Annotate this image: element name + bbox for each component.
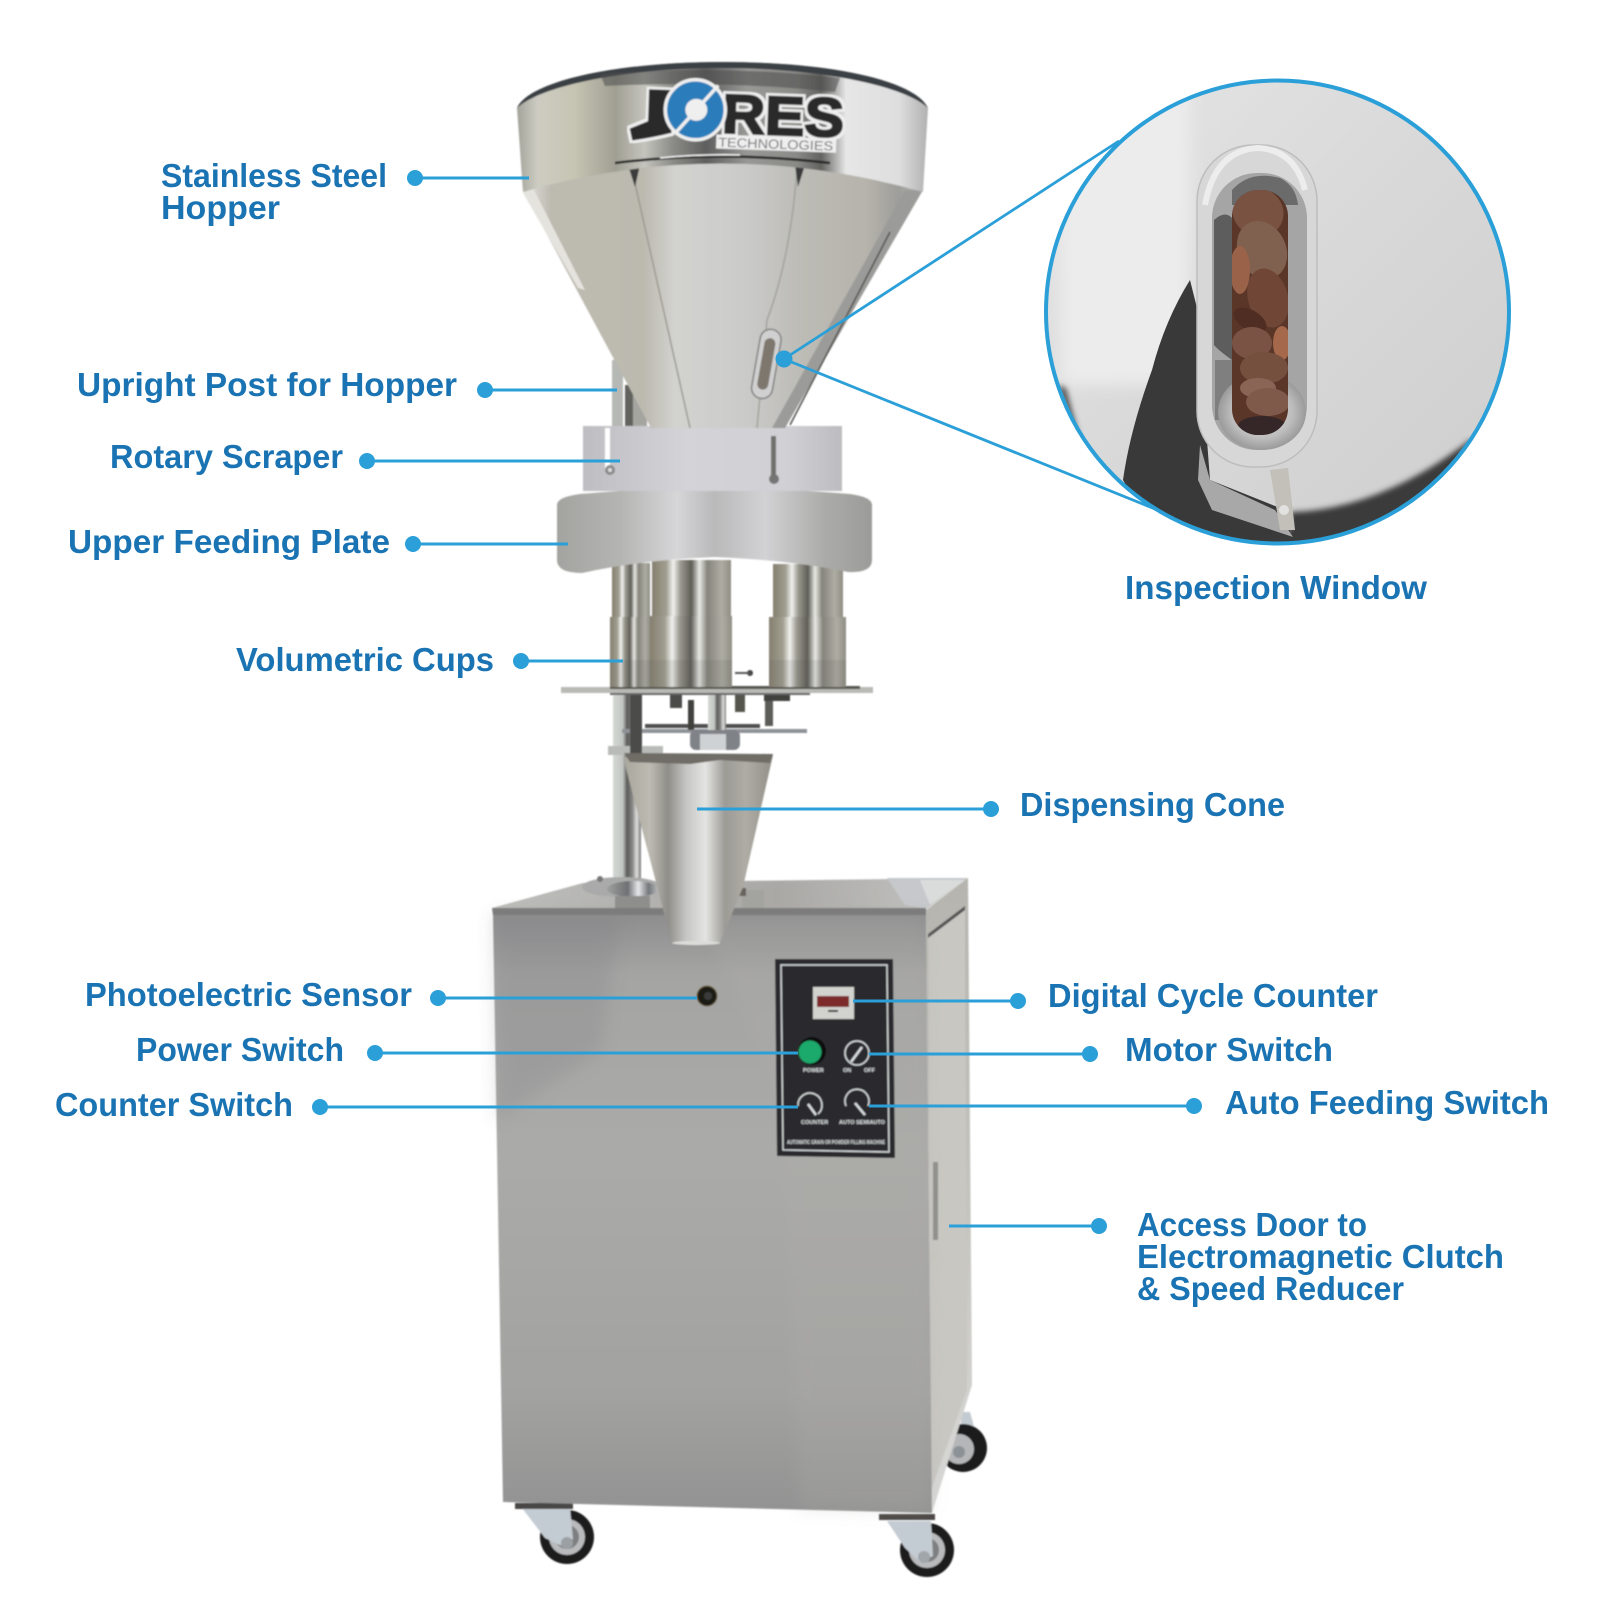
volumetric cups: [610, 560, 846, 687]
power button: [798, 1037, 826, 1074]
upright post and flange: [582, 692, 764, 908]
logo letter J: [629, 89, 673, 142]
callout: motor switch: Motor Switch: [1125, 1031, 1333, 1068]
callout: photoelectric sensor: [85, 976, 697, 1013]
counter dial: COUNTER: [801, 1120, 828, 1126]
logo: TECHNOLOGIES: [718, 135, 834, 154]
callout: dispensing cone: Dispensing Cone: [1020, 786, 1285, 823]
callout: auto feeding switch: Auto Feeding Switch: [1225, 1084, 1549, 1121]
mechanism below plate: [608, 692, 807, 755]
motor dial: ON: [843, 1068, 851, 1074]
callout: upper feeding plate: Upper Feeding Plate: [68, 523, 390, 560]
counter dial: [798, 1093, 828, 1126]
hopper cone: [523, 149, 923, 428]
leader lines to inset: [776, 141, 1160, 511]
hopper posts: [612, 360, 647, 430]
callout: volumetric cups: Volumetric Cups: [236, 641, 494, 678]
hopper lower edge shadow: [1290, 436, 1470, 542]
cabinet: [492, 878, 972, 1513]
power button: POWER: [803, 1068, 824, 1074]
callout: dispensing cone: [697, 786, 1285, 823]
cabinet front face: [493, 914, 932, 1513]
callout: volumetric cups: [236, 641, 623, 678]
control panel: [775, 959, 895, 1158]
auto feeding dial: AUTO: [839, 1120, 855, 1126]
machine illustration: [492, 62, 987, 1577]
stainless steel hopper: [517, 62, 928, 428]
panel caption: AUTOMATIC GRAIN OR POWDER FILLING MACHINE: [787, 1140, 885, 1146]
callout: rotary scraper: [110, 438, 620, 475]
callout: rotary scraper: Rotary Scraper: [110, 438, 343, 475]
callout: access door: Electromagnetic Clutch: [1137, 1238, 1504, 1275]
glass window: [1197, 145, 1317, 467]
callout: motor switch: [869, 1031, 1333, 1068]
wheel: front left caster: [515, 1503, 594, 1564]
callout: digital cycle counter: Digital Cycle Counter: [1048, 977, 1378, 1014]
hopper rim: [517, 62, 928, 192]
callout: counter switch: [55, 1086, 798, 1123]
inset ring: [1046, 80, 1509, 544]
metal fitting: [1198, 445, 1293, 537]
callout: access door: [949, 1206, 1504, 1307]
callout: upper feeding plate: [68, 523, 568, 560]
motor dial: OFF: [864, 1068, 876, 1074]
callout: stainless steel hopper: Stainless Steel: [161, 157, 387, 194]
logo: [629, 78, 845, 154]
digital counter: [813, 987, 854, 1019]
callout: photoelectric sensor: Photoelectric Sensor: [85, 976, 412, 1013]
callout: access door: & Speed Reducer: [1137, 1270, 1404, 1307]
upper feeding plate ring: [557, 488, 872, 573]
inset: inspection window close-up: [1040, 75, 1520, 560]
rotary scraper block: [583, 426, 842, 491]
cabinet top surface: [492, 878, 968, 910]
cabinet side panel: [926, 878, 972, 1513]
callout: power switch: Power Switch: [136, 1031, 344, 1068]
callout: access door: Access Door to: [1137, 1206, 1367, 1243]
door handle: [933, 1162, 938, 1240]
callout: auto feeding switch: [869, 1084, 1549, 1121]
callout: upright post for hopper: Upright Post for Hopper: [77, 366, 457, 403]
lower cup plate: [561, 686, 873, 695]
photoelectric sensor: [697, 986, 717, 1006]
callout: digital cycle counter: [853, 977, 1378, 1014]
callout: stainless steel hopper: Hopper: [161, 189, 280, 226]
motor dial: [843, 1041, 876, 1074]
wheel: front right caster: [879, 1514, 954, 1577]
callout: stainless steel hopper: [161, 157, 529, 226]
auto feeding dial: [839, 1089, 886, 1126]
callout: counter switch: Counter Switch: [55, 1086, 293, 1123]
dark wedge reflection: [1123, 280, 1290, 545]
logo letters RES: RES: [721, 83, 845, 149]
wheel: back caster: [939, 1412, 987, 1472]
callout: inspection window: Inspection Window: [1125, 569, 1427, 606]
dispensing cone: [623, 753, 773, 945]
auto feeding dial: SEMIAUTO: [856, 1120, 886, 1126]
callout: upright post for hopper: [77, 366, 617, 403]
inspection window on hopper: [750, 328, 783, 400]
callout: power switch: [136, 1031, 798, 1068]
beans: [1232, 190, 1288, 435]
